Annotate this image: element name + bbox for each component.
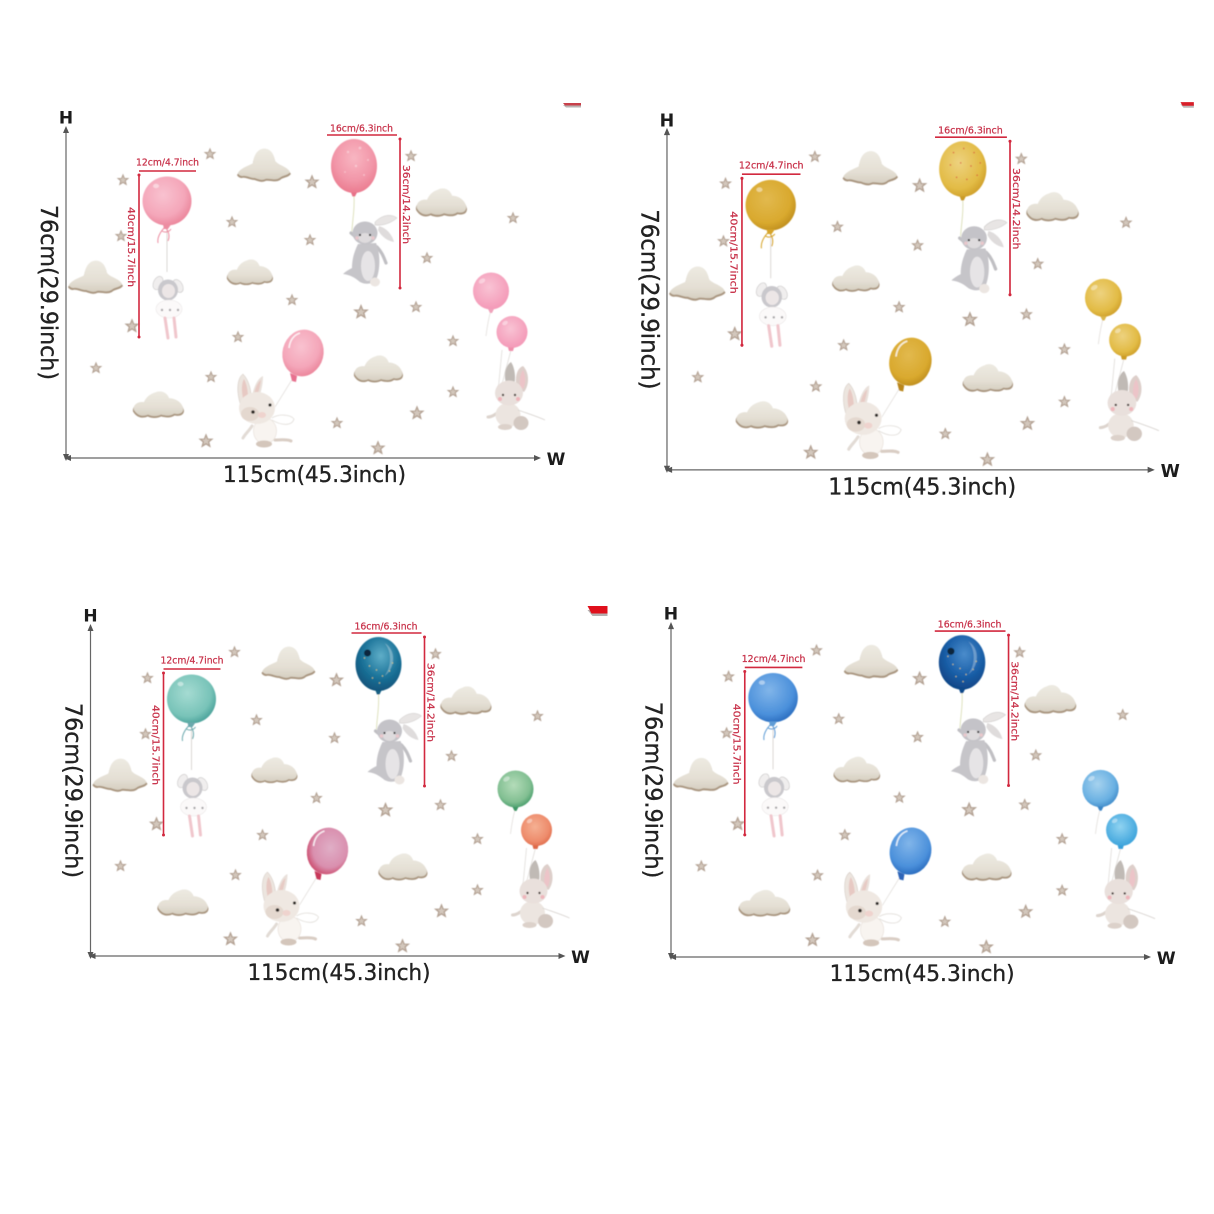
red dimension: balloon two — [935, 631, 1009, 785]
label: 36cm: 36cm/14.2inch — [424, 663, 436, 742]
stars and clouds — [68, 148, 519, 455]
red dimension end caps — [743, 634, 1010, 836]
balloon: upper pink pair — [473, 272, 509, 336]
label: 36cm: 36cm/14.2inch — [1009, 661, 1020, 741]
panel: gold balloons size chart — [635, 102, 1194, 501]
label: 12cm: 12cm/4.7inch — [742, 654, 805, 665]
balloon: tilted magenta — [300, 823, 353, 905]
balloon: large round gold — [746, 180, 796, 278]
panel: blue balloons size chart — [640, 605, 1176, 987]
axis label H: H — [59, 108, 73, 128]
red corner mark — [1180, 102, 1194, 108]
label: 40cm: 40cm/15.7inch — [150, 705, 160, 785]
width dimension: 115cm(45.3inch) — [223, 463, 406, 488]
stars and clouds — [669, 150, 1133, 466]
bunny: white sitting — [843, 383, 901, 459]
label: 12cm: 12cm/4.7inch — [739, 161, 804, 172]
height dimension: 76cm(29.9inch) — [35, 205, 61, 380]
height axis — [63, 126, 69, 461]
red dimension: balloon one — [745, 667, 802, 835]
balloon: tilted gold — [882, 333, 937, 417]
red dimension: balloon one — [139, 171, 196, 337]
width axis — [88, 953, 566, 959]
balloon: tall navy starry — [939, 635, 985, 729]
red dimension end caps — [138, 138, 402, 338]
balloon: lower gold pair — [1109, 324, 1141, 402]
axis label W: W — [1161, 462, 1180, 482]
height dimension: 76cm(29.9inch) — [635, 209, 663, 390]
label: 36cm: 36cm/14.2inch — [400, 165, 411, 244]
axis label W: W — [571, 948, 590, 968]
axis label W: W — [547, 450, 566, 470]
balloon: lower pink pair — [496, 316, 528, 392]
bunny: gray jumping — [951, 220, 1007, 293]
width dimension: 115cm(45.3inch) — [828, 475, 1016, 501]
bunny: floating — [512, 860, 570, 928]
red dimension: balloon two — [935, 137, 1010, 295]
bunny: white sitting — [262, 872, 318, 946]
bunny: floating — [1100, 371, 1159, 441]
width axis — [665, 467, 1155, 473]
balloon: tilted blue — [882, 823, 936, 906]
label: 40cm: 40cm/15.7inch — [728, 211, 739, 294]
width axis — [669, 954, 1151, 960]
bunny: white sitting — [845, 872, 901, 946]
stars and clouds — [92, 646, 544, 953]
balloon: orange — [521, 814, 552, 890]
width dimension: 115cm(45.3inch) — [248, 961, 430, 986]
label: 40cm: 40cm/15.7inch — [125, 207, 136, 287]
red dimension: balloon two — [352, 633, 424, 786]
label: 36cm: 36cm/14.2inch — [1010, 168, 1021, 249]
label: 16cm: 16cm/6.3inch — [938, 126, 1003, 137]
label: 16cm: 16cm/6.3inch — [938, 620, 1001, 631]
red dimension: balloon one — [164, 669, 220, 835]
balloon: tall gold dotted — [939, 141, 986, 237]
panel: pink balloons size chart — [35, 103, 581, 488]
bunny: floating — [1097, 860, 1155, 929]
bunny: white sitting — [238, 374, 294, 448]
bunny: floating — [488, 362, 545, 430]
bunny: gray jumping — [951, 712, 1006, 784]
balloon: upper sky blue — [1082, 770, 1119, 834]
balloon: lower cyan — [1106, 814, 1137, 890]
stars and clouds — [673, 644, 1129, 954]
red dimension: balloon two — [327, 135, 400, 288]
width axis — [64, 455, 541, 461]
red corner mark — [563, 103, 581, 108]
label: 12cm: 12cm/4.7inch — [160, 656, 224, 666]
balloon: large round teal — [167, 674, 216, 770]
bunny: gray jumping — [368, 713, 422, 784]
bunny: hanging — [151, 275, 185, 338]
balloon: tall pink speckled — [331, 139, 377, 232]
label: 12cm: 12cm/4.7inch — [136, 158, 199, 168]
panel: teal and multicolour balloons size chart — [60, 606, 608, 986]
red dimension end caps — [740, 140, 1012, 347]
balloon: large round blue — [748, 673, 798, 769]
balloon: green — [498, 770, 534, 834]
axis label H: H — [660, 111, 674, 131]
axis label W: W — [1157, 949, 1176, 969]
height dimension: 76cm(29.9inch) — [60, 703, 86, 878]
label: 16cm: 16cm/6.3inch — [354, 622, 418, 632]
height axis — [668, 622, 674, 960]
red corner mark — [588, 606, 608, 616]
label: 16cm: 16cm/6.3inch — [330, 124, 393, 134]
red dimension: balloon one — [742, 174, 800, 345]
bunny: gray jumping — [343, 215, 397, 286]
height axis — [88, 624, 94, 959]
balloon: tilted pink — [275, 325, 329, 407]
balloon: tall deep teal starry — [356, 637, 402, 730]
label: 40cm: 40cm/15.7inch — [731, 704, 742, 784]
width dimension: 115cm(45.3inch) — [830, 961, 1015, 987]
balloon: upper gold pair — [1085, 279, 1122, 344]
height axis — [664, 128, 670, 473]
bunny: hanging — [175, 773, 210, 836]
axis label H: H — [664, 605, 678, 625]
axis label H: H — [83, 606, 98, 626]
red dimension end caps — [162, 636, 426, 836]
bunny: hanging — [754, 281, 790, 346]
bunny: hanging — [757, 772, 792, 836]
balloon: large round pink — [142, 176, 192, 272]
height dimension: 76cm(29.9inch) — [640, 702, 667, 878]
